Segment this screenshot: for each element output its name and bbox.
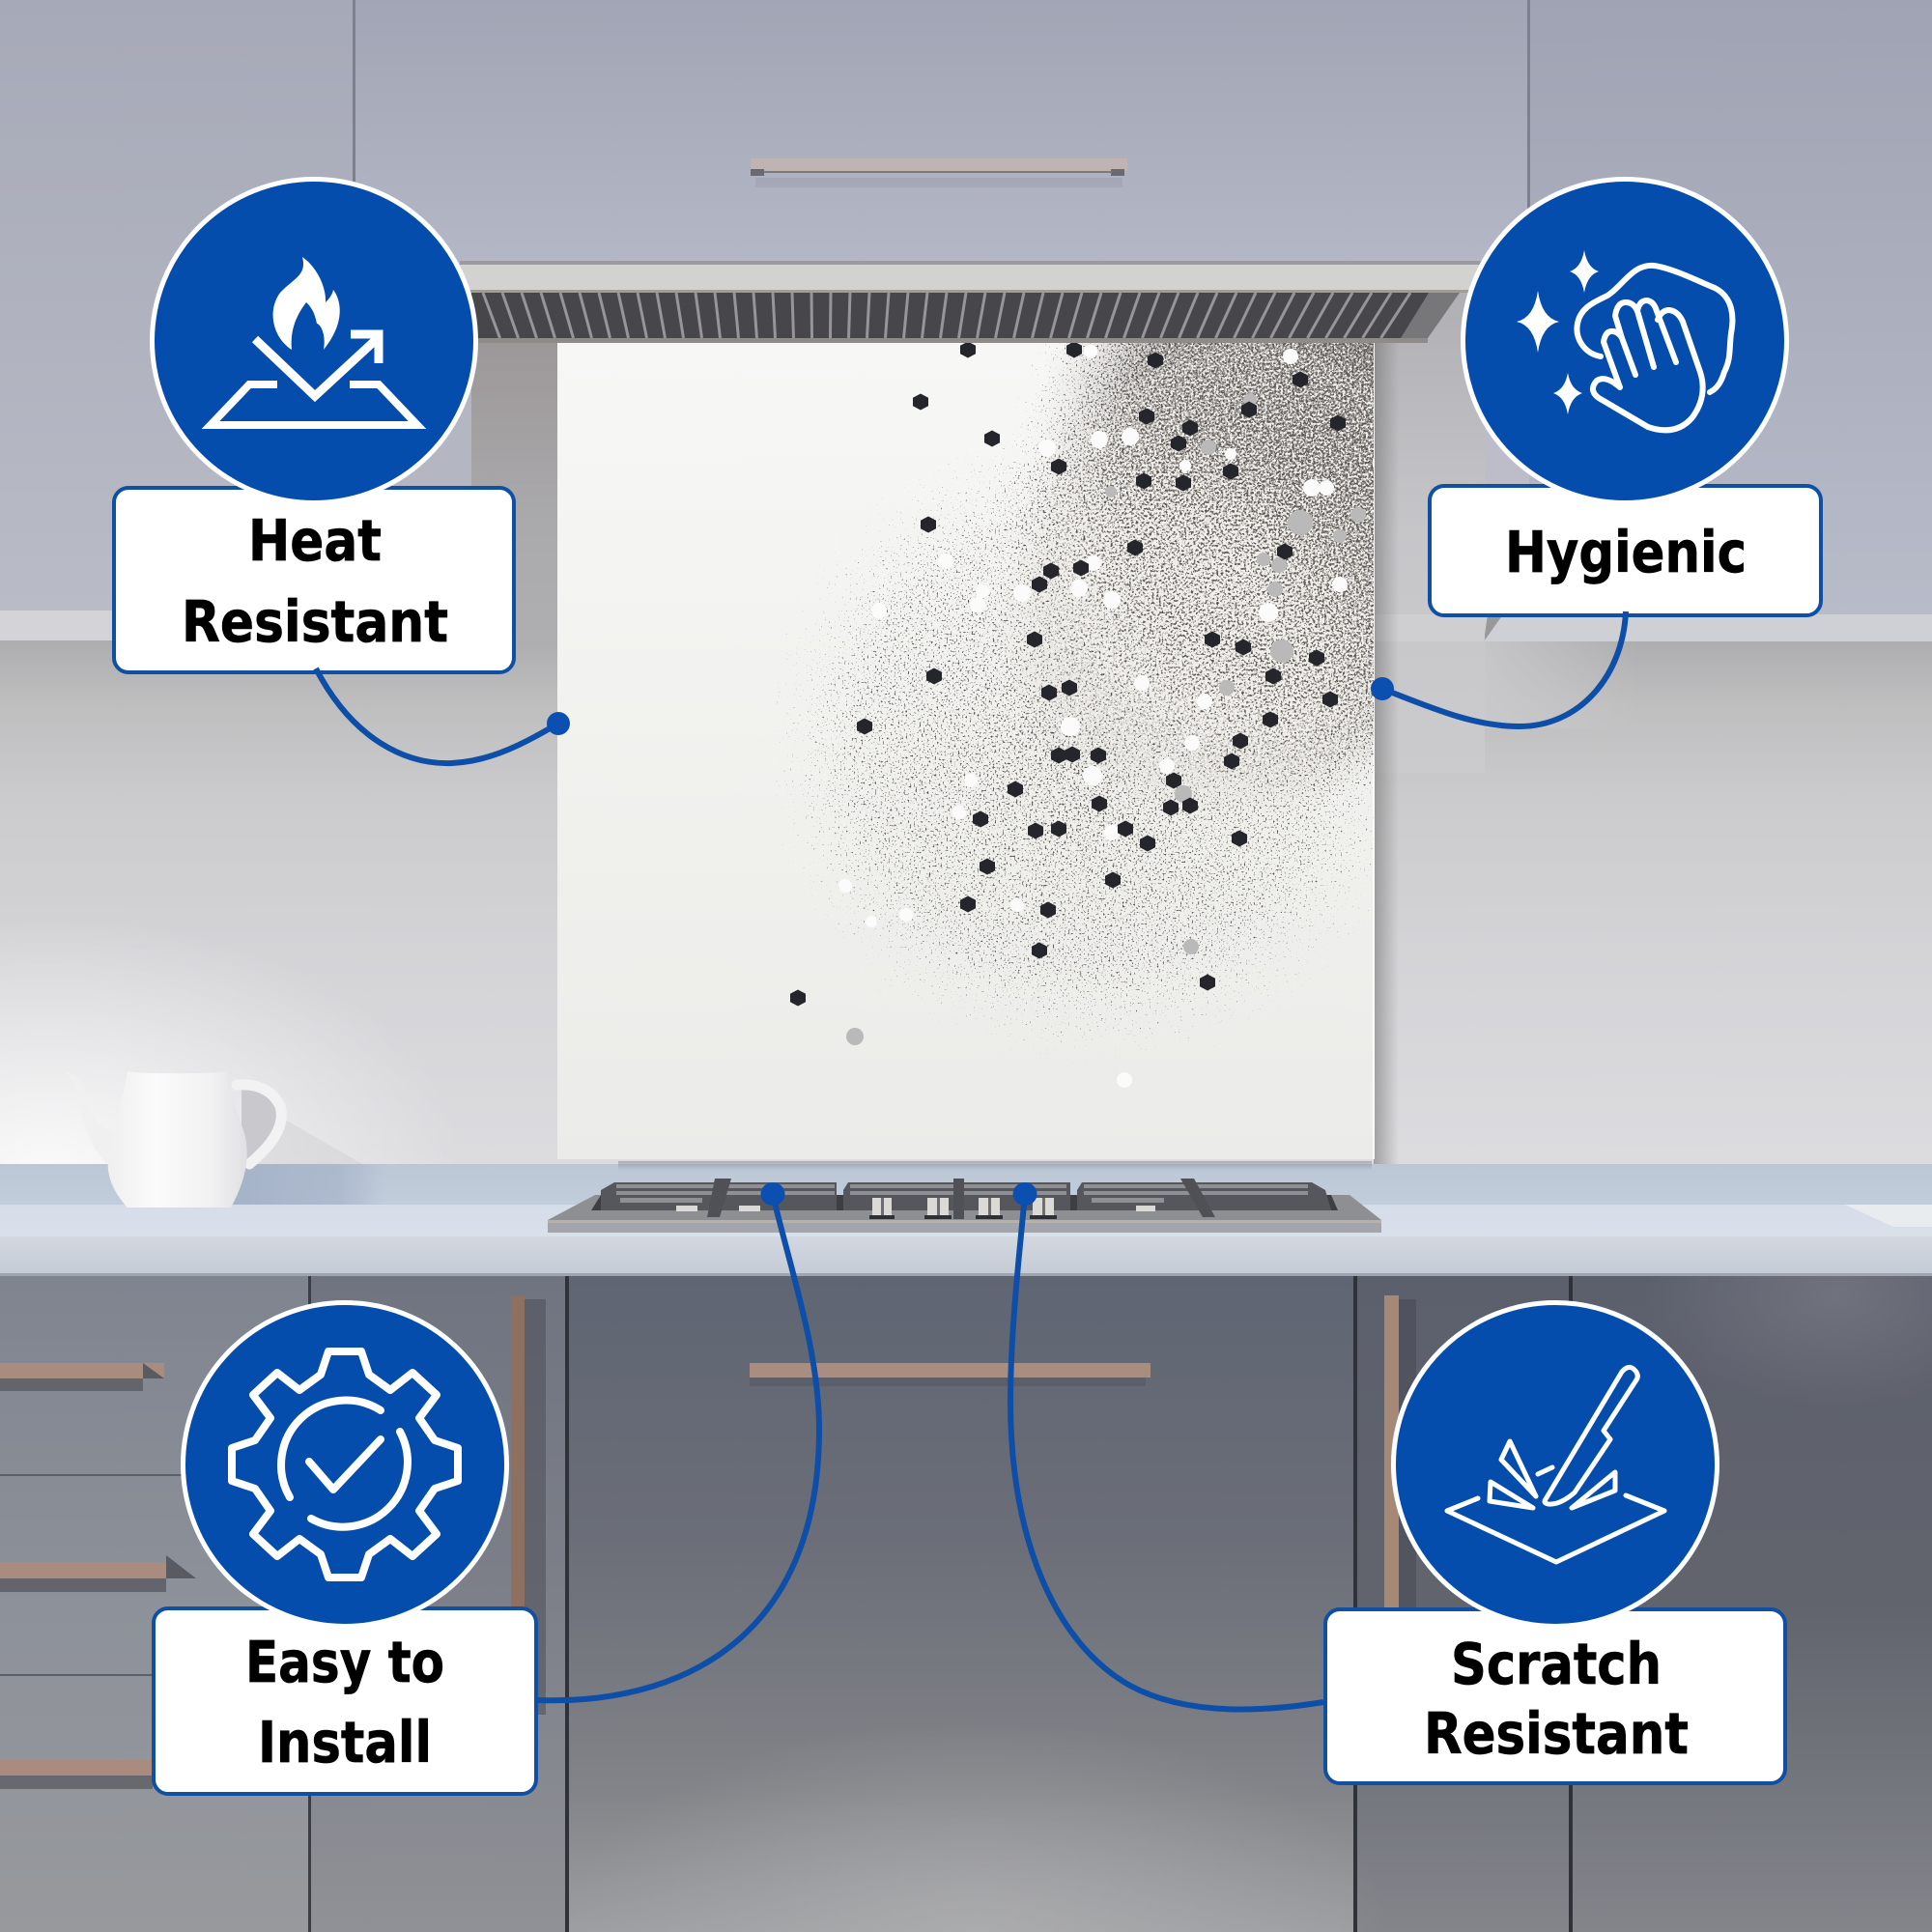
- cabinet handles: [0, 1295, 1416, 1789]
- heading line 2: Install: [258, 1709, 432, 1776]
- heading line 2: Resistant: [1424, 1700, 1689, 1767]
- icon disc: [1393, 1302, 1718, 1627]
- extractor hood: [460, 261, 1481, 343]
- callout: heat resistant: [114, 180, 570, 763]
- connector: [316, 668, 558, 763]
- dark sequins: [790, 342, 1346, 1007]
- icon disc: [1463, 180, 1787, 502]
- teapot: [65, 1071, 281, 1208]
- wall shadow beside panel: [471, 293, 1639, 1164]
- label box: [1430, 486, 1821, 615]
- grey sequins: [846, 393, 1366, 1045]
- heading: Easy to: [245, 1629, 444, 1695]
- glitter cloud: [761, 343, 1374, 1088]
- connector: [538, 1195, 819, 1700]
- connector dot: [761, 1182, 784, 1206]
- upper cabinets: [0, 0, 1932, 641]
- cooktop: [548, 1179, 1381, 1233]
- connector dot: [1012, 1182, 1037, 1206]
- connector dot: [1371, 677, 1394, 700]
- worktop: [0, 1101, 1932, 1276]
- icon disc: [184, 1302, 506, 1627]
- panel: glitter splashback: [557, 343, 1375, 1159]
- icon: knife scratching surface: [1447, 1367, 1664, 1562]
- connector dot: [547, 712, 570, 735]
- icon: gear with check mark: [232, 1351, 458, 1577]
- heading: Hygienic: [1505, 519, 1747, 585]
- white sequins: [838, 345, 1348, 1088]
- upper cabinet handle: [751, 158, 1127, 187]
- connector: [1010, 1195, 1323, 1709]
- heading: Heat: [248, 507, 382, 574]
- heading: Scratch: [1451, 1631, 1662, 1697]
- label box: [1325, 1609, 1785, 1783]
- icon disc: [153, 180, 475, 502]
- callout: scratch resistant: [1010, 1182, 1785, 1783]
- label box: [114, 488, 514, 672]
- wall: [0, 639, 1932, 1169]
- connector: [1382, 611, 1626, 726]
- callout: easy to install: [154, 1182, 819, 1794]
- icon: hand wiping with sparkles: [1517, 250, 1732, 430]
- callout: hygienic: [1371, 180, 1821, 726]
- label box: [154, 1608, 536, 1794]
- icon: flame over surface: [211, 257, 417, 425]
- heading line 2: Resistant: [182, 588, 448, 655]
- base cabinets: [0, 1276, 1932, 1932]
